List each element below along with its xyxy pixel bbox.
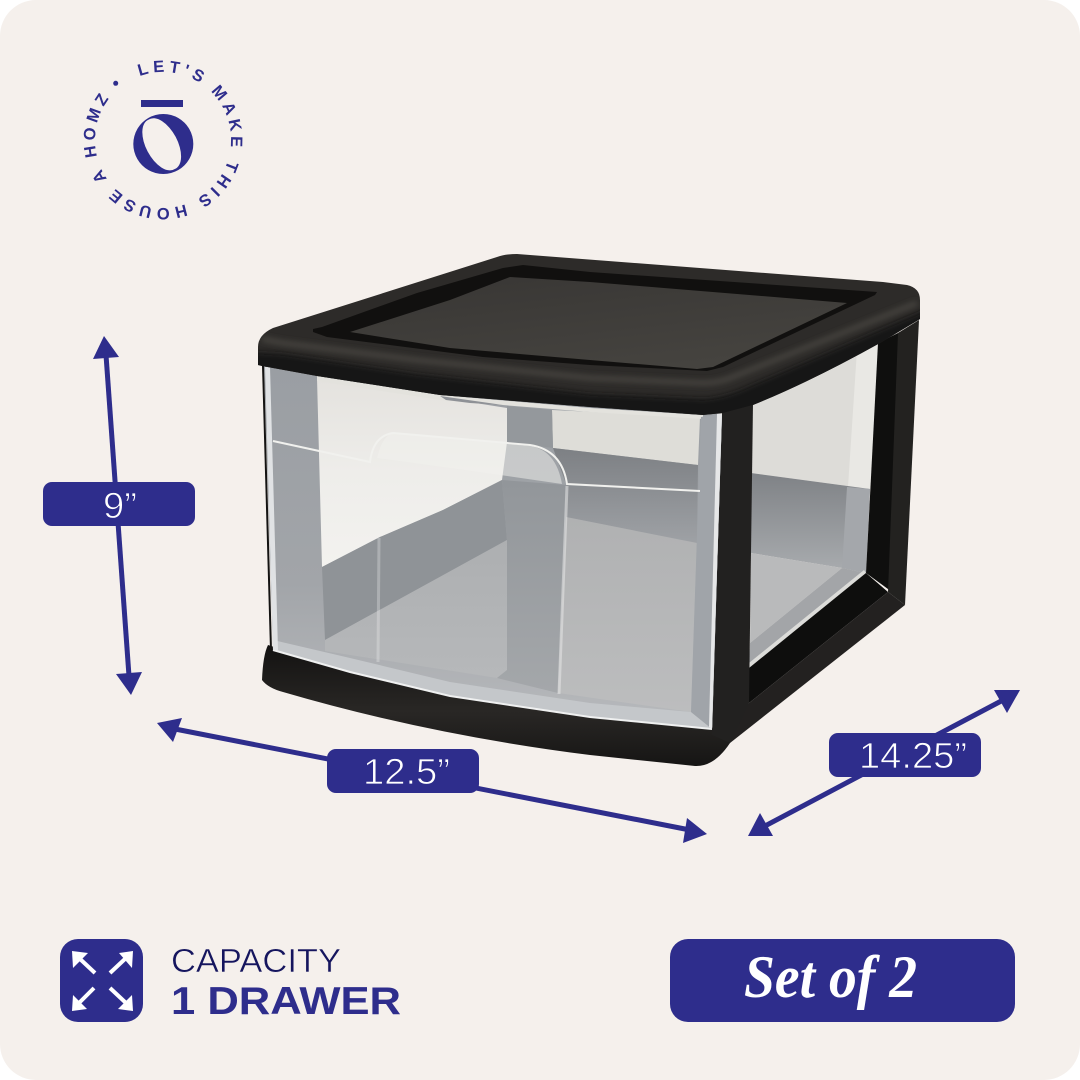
product: storage drawer [250,254,926,766]
drawer handle [273,433,700,491]
logo ring text: LET'S MAKE THIS HOUSE A HOMZ [84,60,242,220]
lower centre pillar [497,480,567,693]
label text: 12.5” [363,751,450,792]
left floor [325,540,507,678]
label pill [43,482,195,526]
arrow up right [110,951,133,973]
logo dot [113,81,118,86]
icon: capacity arrows [60,939,143,1022]
side lower rail [749,573,888,703]
badge: set of 2 [670,939,1015,1022]
left frosted strip [265,367,278,650]
lid surface [350,277,847,369]
depth dimension: 14.25 in [748,690,1020,836]
right floor [558,517,697,712]
capacity value: 1 DRAWER [171,980,401,1023]
rear bar [553,448,698,543]
side base [712,592,905,743]
upper left light area [317,378,507,567]
arrow [157,718,707,843]
height dimension: 9 in [43,336,195,695]
bottom base [262,645,730,766]
label pill [327,749,479,793]
front rim shading [250,303,926,420]
rear pillar [866,320,919,605]
arrow down left [72,988,94,1011]
upper centre pillar [507,406,553,448]
logo macron bar [141,100,183,107]
arrow [748,690,1020,836]
vertical seams [378,538,379,662]
top frame [258,254,920,415]
upper right light area [552,410,700,465]
diagonal rail [322,480,507,640]
logo letter o [133,114,193,174]
label text: 14.25” [859,735,967,776]
top light strip [317,376,703,419]
width dimension: 12.5 in [157,718,707,843]
bottom frosted strip [273,640,712,729]
right frosted column [691,414,722,729]
lid recess [313,265,877,371]
arrow down right [110,988,133,1011]
logo badge [84,60,242,220]
label text: 9” [103,485,137,526]
panel body [264,366,722,729]
capacity label: CAPACITY [171,942,341,979]
side window [749,342,880,668]
front pillar [712,403,753,743]
left black edge [263,366,271,650]
arrow [93,336,142,695]
arrow up left [72,951,95,973]
badge: set of 2: Set of 2 [744,944,917,1010]
drawer front panel [263,366,722,729]
label pill [829,733,981,777]
